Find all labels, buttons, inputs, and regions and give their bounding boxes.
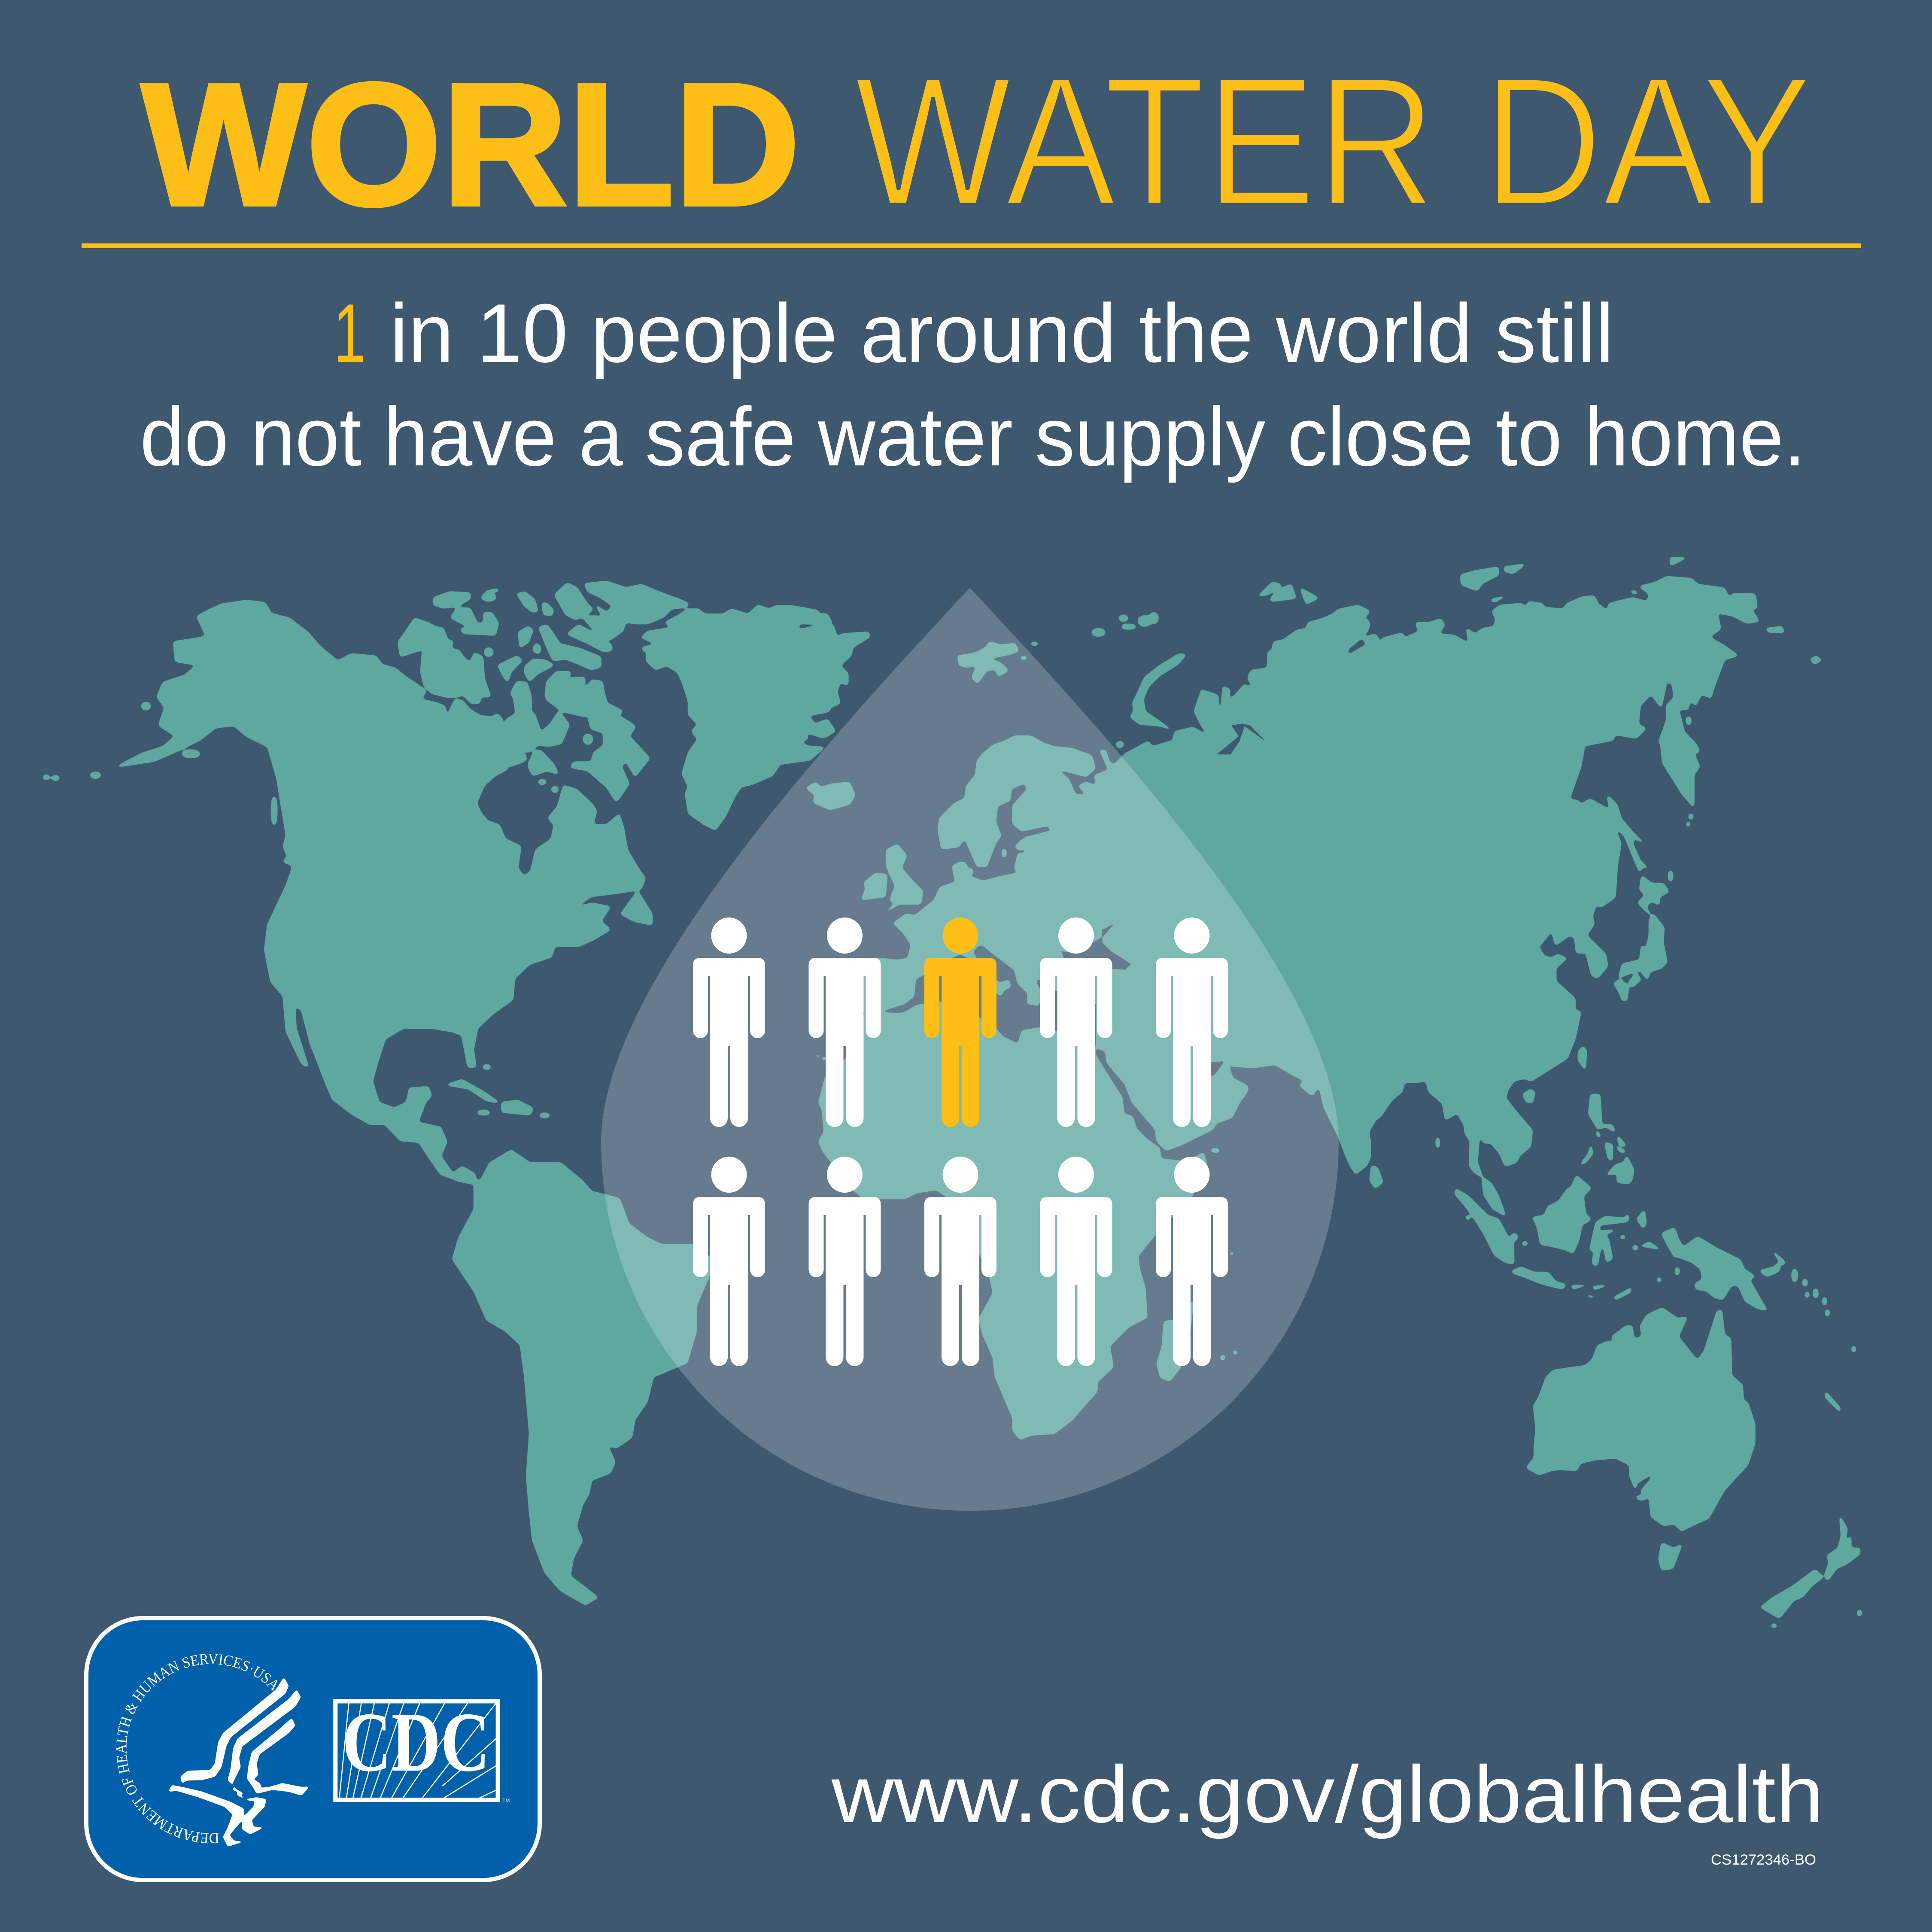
Sri Lanka (1370, 1166, 1382, 1188)
Borneo (1533, 1176, 1591, 1253)
New Guinea (1662, 1228, 1767, 1310)
Sulawesi (1590, 1214, 1628, 1266)
icon: person 10 (1156, 1157, 1228, 1366)
CDC logo badge (86, 1618, 540, 1880)
Kyushu (1614, 979, 1628, 1000)
title: WATER DAY: WATER DAY (854, 39, 1812, 244)
subtitle line 2: do not have a safe water supply close to home. (140, 390, 1806, 483)
Mindanao (1607, 1156, 1634, 1184)
icon: person 7 (809, 1157, 881, 1366)
icon: person 2 (809, 917, 881, 1127)
icon: person 6 (693, 1157, 765, 1366)
highlighted number 1: 1 (334, 287, 366, 380)
icon: person 4 (1040, 917, 1112, 1127)
water drop (601, 588, 1339, 1511)
CDC box frame (335, 1701, 498, 1800)
inland seas and inlets (1062, 724, 1264, 969)
Canadian Arctic and Greenland (386, 581, 870, 829)
CDC wordmark: CDC (342, 1695, 490, 1789)
Asia (1245, 558, 1821, 1102)
Iceland (807, 783, 855, 809)
Shikoku (1628, 973, 1640, 987)
icon: person 1 (693, 917, 765, 1127)
icon: highlighted person (924, 917, 996, 1127)
title: WORLD: WORLD (141, 47, 800, 242)
Taiwan (1579, 1047, 1586, 1069)
Greenland (641, 605, 870, 829)
HHS eagle emblem (169, 1677, 310, 1847)
South and Southeast Asia, Oceania (1331, 1038, 1862, 1628)
South America (453, 1150, 711, 1604)
New Zealand South Island (1761, 1570, 1823, 1618)
Great Britain (885, 845, 922, 912)
Africa, Arabia and Madagascar (816, 981, 1352, 1439)
Halmahera (1637, 1210, 1646, 1228)
badge background (86, 1618, 540, 1880)
New Caledonia (1826, 1392, 1840, 1412)
Sakhalin (1607, 796, 1648, 872)
Ireland (862, 873, 887, 899)
website URL: www.cdc.gov/globalhealth (831, 1749, 1824, 1839)
Europe and northern Russia (807, 613, 1289, 1010)
title rule (82, 243, 1861, 248)
people icons (693, 917, 1228, 1366)
icon: person 5 (1156, 917, 1228, 1127)
Hokkaido (1638, 876, 1669, 916)
Java (1513, 1267, 1566, 1289)
North America (43, 601, 652, 1185)
document code: CS1272346-BO (1711, 1852, 1816, 1868)
Hainan (1523, 1090, 1534, 1102)
subtitle (140, 287, 1806, 483)
Sumatra (1455, 1189, 1513, 1264)
Honshu (1619, 914, 1667, 979)
Black Sea and Gulf of Ob (1062, 724, 1264, 969)
CDC box (335, 1701, 498, 1800)
icon: person 9 (1040, 1157, 1112, 1366)
trademark: TM (502, 1798, 510, 1804)
Palawan (1580, 1145, 1592, 1165)
subtitle line 1: in 10 people around the world still (390, 287, 1614, 380)
world map (43, 558, 1862, 1628)
CDC box rays (339, 1703, 497, 1799)
Australia (1527, 1308, 1755, 1531)
icon: person 8 (924, 1157, 996, 1366)
Luzon (1589, 1095, 1615, 1132)
New Zealand North Island (1825, 1516, 1859, 1580)
title (141, 39, 1812, 244)
HHS seal text: DEPARTMENT OF HEALTH & HUMAN SERVICES·USA (113, 1650, 283, 1847)
Tasmania (1659, 1543, 1682, 1570)
